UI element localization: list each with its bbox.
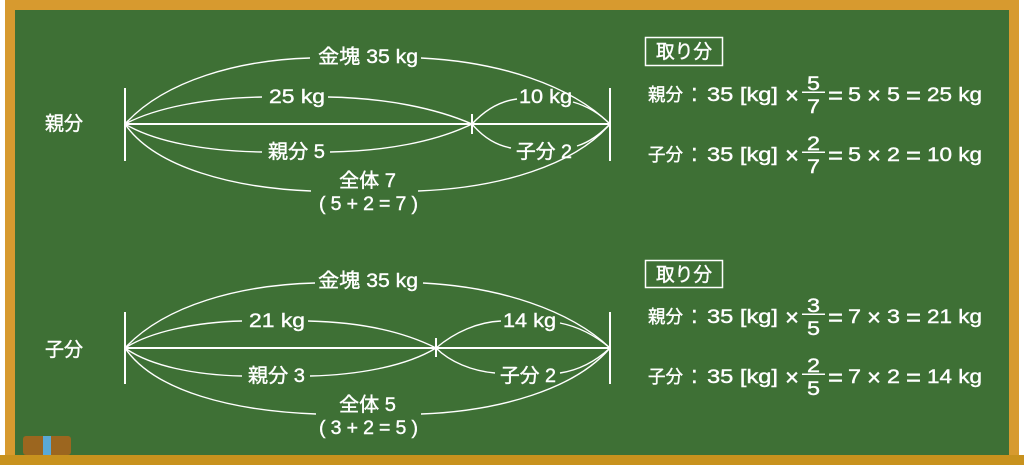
- formula: 親分: 5: [887, 84, 900, 106]
- formula: 子分: 2: [807, 355, 820, 377]
- arc: 親分 5: 親分 5: [268, 141, 325, 163]
- formula: 親分: 7: [807, 96, 820, 118]
- arc: 25 kg: 25 kg: [269, 86, 325, 108]
- formula: 親分: ×: [867, 82, 881, 110]
- formula: 子分: =: [828, 142, 843, 170]
- formula: 子分: 7: [848, 366, 861, 388]
- formula: 子分: 2: [807, 133, 820, 155]
- diagram: 子分 line segments: [125, 270, 610, 439]
- formula: 子分: 35 [kg]: [707, 366, 778, 388]
- formula: 子分: 子分: [648, 145, 683, 165]
- formula: 子分: 2: [887, 144, 900, 166]
- formula: 子分: :: [691, 140, 698, 167]
- top arc: gold 35 kg: [125, 46, 610, 124]
- arc: 14 kg: 14 kg: [503, 310, 556, 332]
- formula: 親分: =: [828, 82, 843, 110]
- formula: 親分: ×: [785, 82, 799, 110]
- bottom arc: 全体 5: (3+2=5): [319, 417, 418, 439]
- arc: 親分 5: [125, 124, 472, 163]
- panel: 親分 share calculation: [646, 38, 982, 178]
- formula: 子分: =: [906, 364, 921, 392]
- formula: 子分: =: [828, 364, 843, 392]
- formula: 子分: 14 kg: [927, 366, 982, 388]
- formula: 子分: =: [906, 142, 921, 170]
- arc: 親分 3: [125, 348, 436, 387]
- formula: 親分: 5: [807, 73, 820, 95]
- formula: 親分: =: [906, 82, 921, 110]
- arc: 25 kg: [125, 86, 472, 124]
- arc: 子分 2: [436, 348, 610, 387]
- bottom arc: 全体 5: [125, 348, 610, 439]
- formula: 親分: 5: [848, 84, 861, 106]
- diagram: 親分 line segments: [125, 46, 610, 215]
- formula: 子分: ×: [867, 364, 881, 392]
- arc: 子分 2: [472, 124, 610, 163]
- formula: 親分: 3: [807, 295, 820, 317]
- formula: 親分: 35 [kg]: [707, 84, 778, 106]
- bottom arc: 全体 7: [125, 124, 610, 215]
- formula: 親分: [648, 295, 982, 340]
- formula: 子分: ×: [785, 142, 799, 170]
- formula: 子分: 7: [807, 156, 820, 178]
- arc: 21 kg: [125, 310, 436, 348]
- formula: 親分: :: [691, 80, 698, 107]
- formula: 親分: :: [691, 302, 698, 329]
- bottom arc: 全体 5: 全体 5: [339, 394, 396, 416]
- formula: 親分: [648, 73, 982, 118]
- formula: 子分: :: [691, 362, 698, 389]
- heading box: [646, 260, 722, 288]
- formula: 親分: ×: [785, 304, 799, 332]
- label: 子分 row: 子分: [45, 339, 83, 361]
- arc: 14 kg: [436, 310, 610, 348]
- heading box: 取り分: [656, 264, 712, 286]
- formula: 親分: 25 kg: [927, 84, 982, 106]
- label: 親分 row: 親分: [45, 113, 83, 135]
- formula: 子分: ×: [867, 142, 881, 170]
- arc: 親分 3: 親分 3: [248, 365, 305, 387]
- arc: 子分 2: 子分 2: [516, 141, 572, 163]
- formula: 親分: 35 [kg]: [707, 306, 778, 328]
- formula: 親分: =: [828, 304, 843, 332]
- bottom arc: 全体 7: 全体 7: [339, 170, 396, 192]
- formula: 親分: 3: [887, 306, 900, 328]
- formula: 親分: 親分: [648, 85, 683, 105]
- icon: eraser: [23, 436, 71, 455]
- axis line: [125, 88, 610, 161]
- formula: 子分: 5: [848, 144, 861, 166]
- formula: 子分: 2: [887, 366, 900, 388]
- formula: 子分: [648, 355, 982, 400]
- formula: 子分: 10 kg: [927, 144, 982, 166]
- formula: 親分: 7: [848, 306, 861, 328]
- formula: 親分: 親分: [648, 307, 683, 327]
- formula: 親分: ×: [867, 304, 881, 332]
- arc: 子分 2: 子分 2: [500, 365, 556, 387]
- formula: 親分: 21 kg: [927, 306, 982, 328]
- top arc: gold 35 kg: [125, 270, 610, 348]
- panel: 子分 share calculation: [646, 260, 982, 400]
- axis line: [125, 312, 610, 384]
- formula: 親分: =: [906, 304, 921, 332]
- formula: 子分: 5: [807, 378, 820, 400]
- top arc: gold 35 kg: 金塊 35 kg: [318, 270, 418, 292]
- formula: 子分: [648, 133, 982, 178]
- formula: 親分: 5: [807, 318, 820, 340]
- formula: 子分: 35 [kg]: [707, 144, 778, 166]
- formula: 子分: ×: [785, 364, 799, 392]
- formula: 子分: 子分: [648, 367, 683, 387]
- bottom arc: 全体 7: (5+2=7): [319, 193, 418, 215]
- arc: 10 kg: 10 kg: [519, 86, 572, 108]
- top arc: gold 35 kg: 金塊 35 kg: [318, 46, 418, 68]
- arc: 21 kg: 21 kg: [249, 310, 305, 332]
- heading box: 取り分: [656, 41, 712, 63]
- arc: 10 kg: [472, 86, 610, 124]
- heading box: [646, 38, 722, 66]
